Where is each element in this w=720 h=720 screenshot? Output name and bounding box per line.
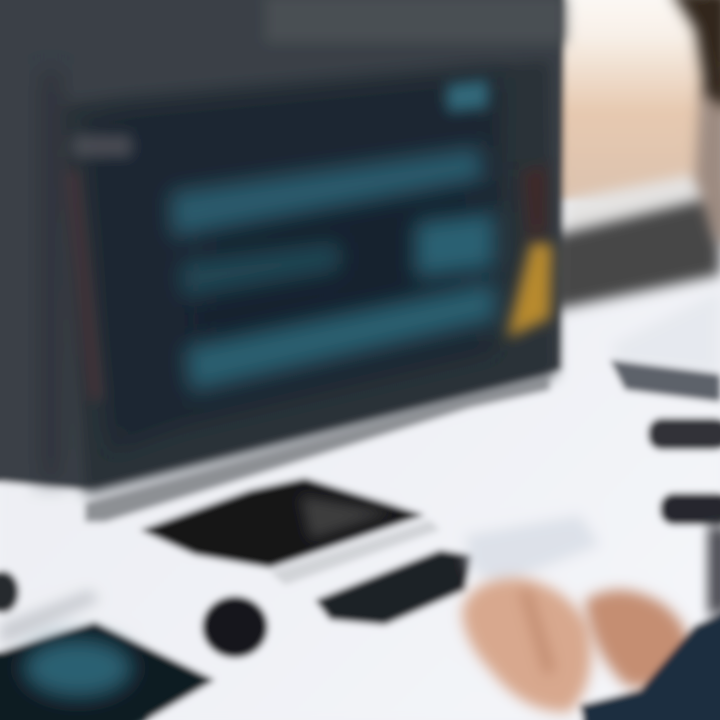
left object stripe (0, 590, 100, 645)
stand edge (270, 520, 440, 585)
wall dark column (38, 70, 64, 480)
stand highlight (300, 495, 395, 540)
top screen icon (447, 80, 488, 112)
dark item 1 (648, 418, 720, 450)
left panel label (72, 135, 132, 157)
hands (462, 578, 690, 712)
paper (465, 515, 600, 585)
screen top highlight (265, 0, 565, 43)
monitor stand base (140, 478, 425, 568)
left red stripe (66, 170, 102, 400)
right hand (585, 590, 690, 688)
window (555, 0, 720, 235)
left hand (462, 578, 591, 712)
tablet screen glow (23, 638, 133, 698)
yellow accent (507, 240, 552, 338)
screen dark centre (200, 170, 490, 360)
tablet (0, 622, 215, 720)
code lines (170, 147, 497, 392)
sleeve (580, 610, 720, 720)
monitor (60, 0, 565, 522)
grey band (610, 360, 720, 402)
monitor bezel (60, 60, 555, 495)
hair (670, 0, 720, 110)
wall (0, 0, 565, 490)
person head (670, 0, 720, 245)
monitor silver lower edge (85, 378, 550, 522)
left object (0, 571, 19, 613)
dark item 2 (660, 493, 720, 525)
keyboard (315, 550, 472, 625)
skin (695, 60, 720, 245)
screen (85, 75, 500, 450)
finger shadow (520, 590, 555, 675)
white top item (610, 290, 720, 375)
mouse (202, 596, 268, 658)
red accent (522, 165, 548, 242)
stacked items right (610, 290, 720, 615)
dark vertical (708, 525, 720, 615)
window sill band (555, 195, 720, 310)
